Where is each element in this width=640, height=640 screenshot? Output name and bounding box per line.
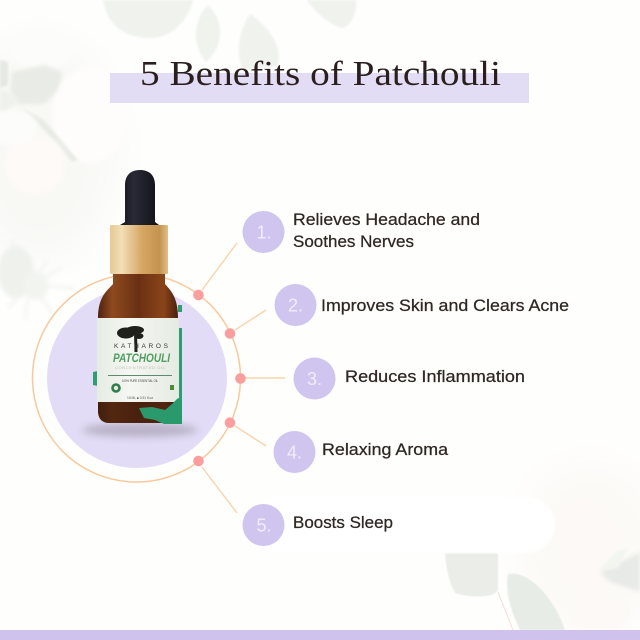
- background: bottom right leaves and flowers: [445, 498, 640, 632]
- background: white text panel: [250, 497, 555, 553]
- label product name: PATCHOULI: [113, 351, 171, 365]
- label volume: 15 ML ■ 0.51 fl.oz: [127, 396, 153, 400]
- benefit 3: 3.: [307, 369, 322, 389]
- title band: [110, 73, 529, 103]
- background: thistle: [0, 240, 75, 320]
- label: [97, 318, 179, 402]
- benefit 2: 2.: [288, 296, 303, 316]
- gold collar: [110, 225, 168, 274]
- label divider: [108, 375, 172, 376]
- benefit 1: Soothes Nerves: [293, 233, 414, 251]
- bottle shadow: [82, 423, 198, 437]
- bottom band: [0, 630, 640, 640]
- background: top leaves: [103, 0, 356, 70]
- glass base shade: [98, 400, 178, 423]
- benefit 2: Improves Skin and Clears Acne: [321, 297, 569, 315]
- amber glass body: [98, 272, 178, 423]
- background: left flowers and foliage: [0, 30, 128, 195]
- connector dots: [193, 290, 246, 466]
- label seal icon: [111, 383, 121, 393]
- label right icon: [170, 385, 174, 390]
- benefit 4: [274, 431, 449, 473]
- benefit 4: 4.: [287, 442, 302, 462]
- benefit 4: Relaxing Aroma: [322, 441, 449, 459]
- benefit 3: Reduces Inflammation: [345, 368, 525, 386]
- green leaf: [139, 398, 182, 424]
- label tree logo: [117, 326, 144, 352]
- benefit 2: [274, 284, 569, 326]
- inner disc: [47, 288, 227, 468]
- product bottle: [93, 170, 182, 424]
- connector lines: [202, 243, 285, 513]
- benefit 1: [242, 211, 480, 253]
- leaf behind bottle: [93, 305, 182, 400]
- label brand: KATHAROS: [114, 343, 169, 350]
- dropper rubber bulb: [120, 170, 159, 225]
- label small print: 100% PURE ESSENTIAL OIL: [122, 379, 158, 383]
- benefit 3: [294, 358, 525, 400]
- benefit 1: Relieves Headache and: [293, 211, 480, 229]
- benefit 5: Boosts Sleep: [293, 514, 393, 532]
- label subtitle: CONCENTRATED OIL: [115, 365, 166, 370]
- benefit 1: 1.: [256, 222, 272, 242]
- benefit 5: [242, 504, 393, 546]
- benefit 5: 5.: [256, 516, 272, 536]
- ring: [32, 274, 240, 482]
- title: 5 Benefits of Patchouli: [140, 54, 501, 93]
